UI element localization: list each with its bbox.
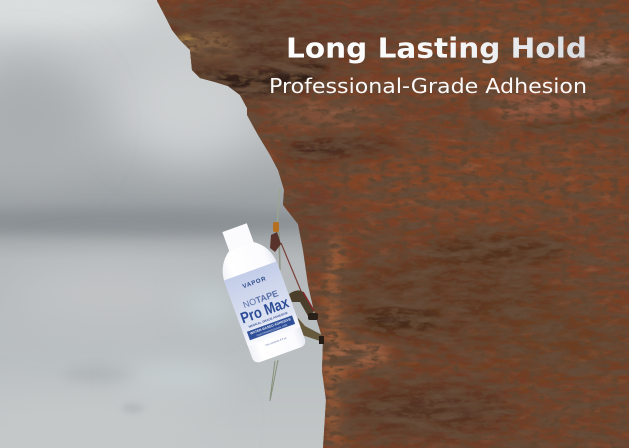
volume text: Net contents 8 fl oz: [265, 336, 288, 347]
bottle body: [215, 237, 307, 364]
blue band: [247, 315, 295, 340]
blue band: FOR PROFESSIONAL USE: [256, 323, 288, 338]
descriptor line: MEDICAL GRADE ADHESIVE: [248, 311, 288, 329]
bottle cap: [222, 223, 254, 252]
brand name: VAPOR: [242, 276, 267, 290]
blue band: WATER-BASED ADHESIVE: [250, 317, 292, 336]
product bottle: [208, 218, 307, 364]
product name: Pro Max: [238, 294, 292, 327]
product line: NOTAPE: [242, 288, 280, 310]
rock cliff: [157, 0, 629, 448]
bottle label: [224, 261, 303, 353]
climber and ropes: [270, 188, 324, 401]
title: Long Lasting Hold: [286, 32, 587, 64]
subtitle: Professional-Grade Adhesion: [269, 74, 587, 98]
